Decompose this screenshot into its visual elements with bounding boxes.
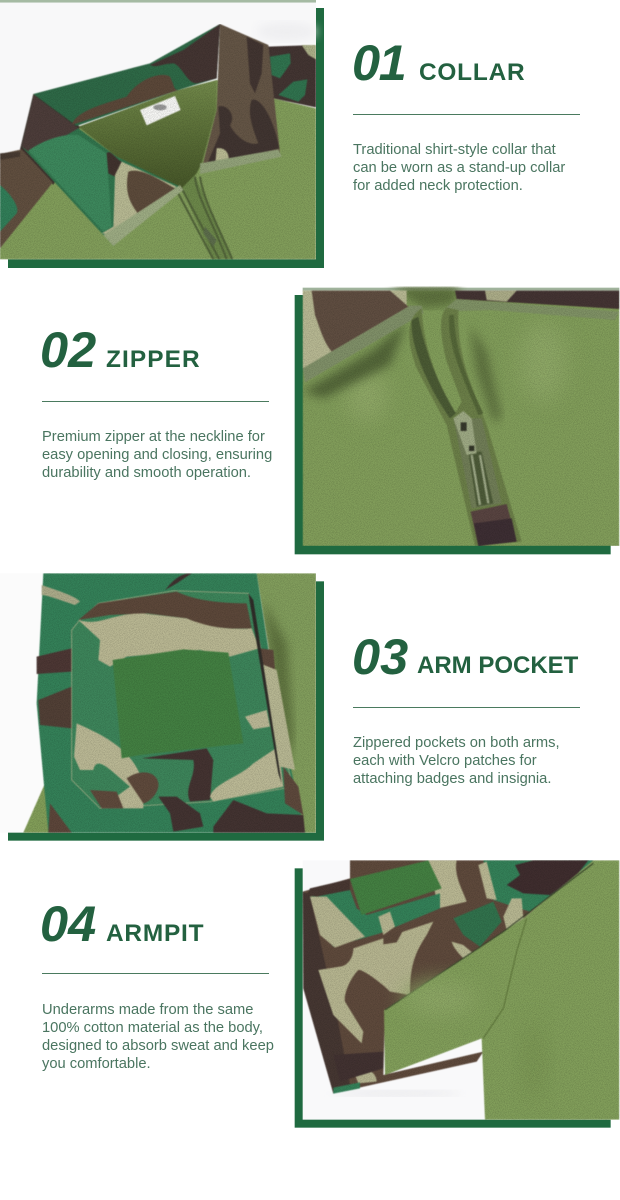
number 04: 04 — [40, 895, 96, 952]
description: collar: can be worn as a stand-up collar — [353, 160, 565, 176]
description: armpit: Underarms made from the same — [42, 1002, 253, 1018]
description: collar — [353, 142, 566, 194]
description: arm pocket: each with Velcro patches for — [353, 753, 537, 769]
description: arm pocket — [353, 735, 560, 787]
feature text: arm pocket — [352, 628, 580, 787]
description: collar: for added neck protection. — [353, 178, 523, 194]
description: armpit: you comfortable. — [42, 1056, 151, 1072]
heading: collar: COLLAR — [419, 59, 525, 86]
description: collar: Traditional shirt-style collar that — [353, 142, 556, 158]
description: zipper: durability and smooth operation. — [42, 465, 251, 481]
feature text: armpit — [40, 895, 274, 1072]
description: arm pocket: attaching badges and insignia. — [353, 771, 551, 787]
panel: zipper — [40, 286, 620, 554]
panel: armpit — [40, 860, 620, 1128]
description: armpit: 100% cotton material as the body, — [42, 1020, 263, 1036]
heading: armpit: ARMPIT — [106, 920, 204, 947]
photo: arm pocket — [8, 573, 324, 841]
panel: arm pocket — [8, 573, 580, 841]
photo: collar — [0, 0, 324, 268]
feature text: collar — [352, 34, 580, 194]
number 02: 02 — [40, 321, 96, 378]
feature text: zipper — [40, 321, 272, 481]
heading: zipper: ZIPPER — [106, 346, 201, 373]
description: zipper: Premium zipper at the neckline for — [42, 429, 265, 445]
heading: arm pocket: ARM POCKET — [417, 652, 578, 679]
panel: collar — [0, 0, 580, 268]
description: armpit: designed to absorb sweat and keep — [42, 1038, 274, 1054]
number 03: 03 — [352, 628, 408, 685]
description: zipper — [42, 429, 272, 481]
number 01: 01 — [352, 34, 405, 91]
photo: zipper — [294, 286, 620, 554]
photo: armpit — [294, 860, 620, 1128]
description: arm pocket: Zippered pockets on both arms, — [353, 735, 560, 751]
description: zipper: easy opening and closing, ensuring — [42, 447, 272, 463]
description: armpit — [42, 1002, 274, 1072]
